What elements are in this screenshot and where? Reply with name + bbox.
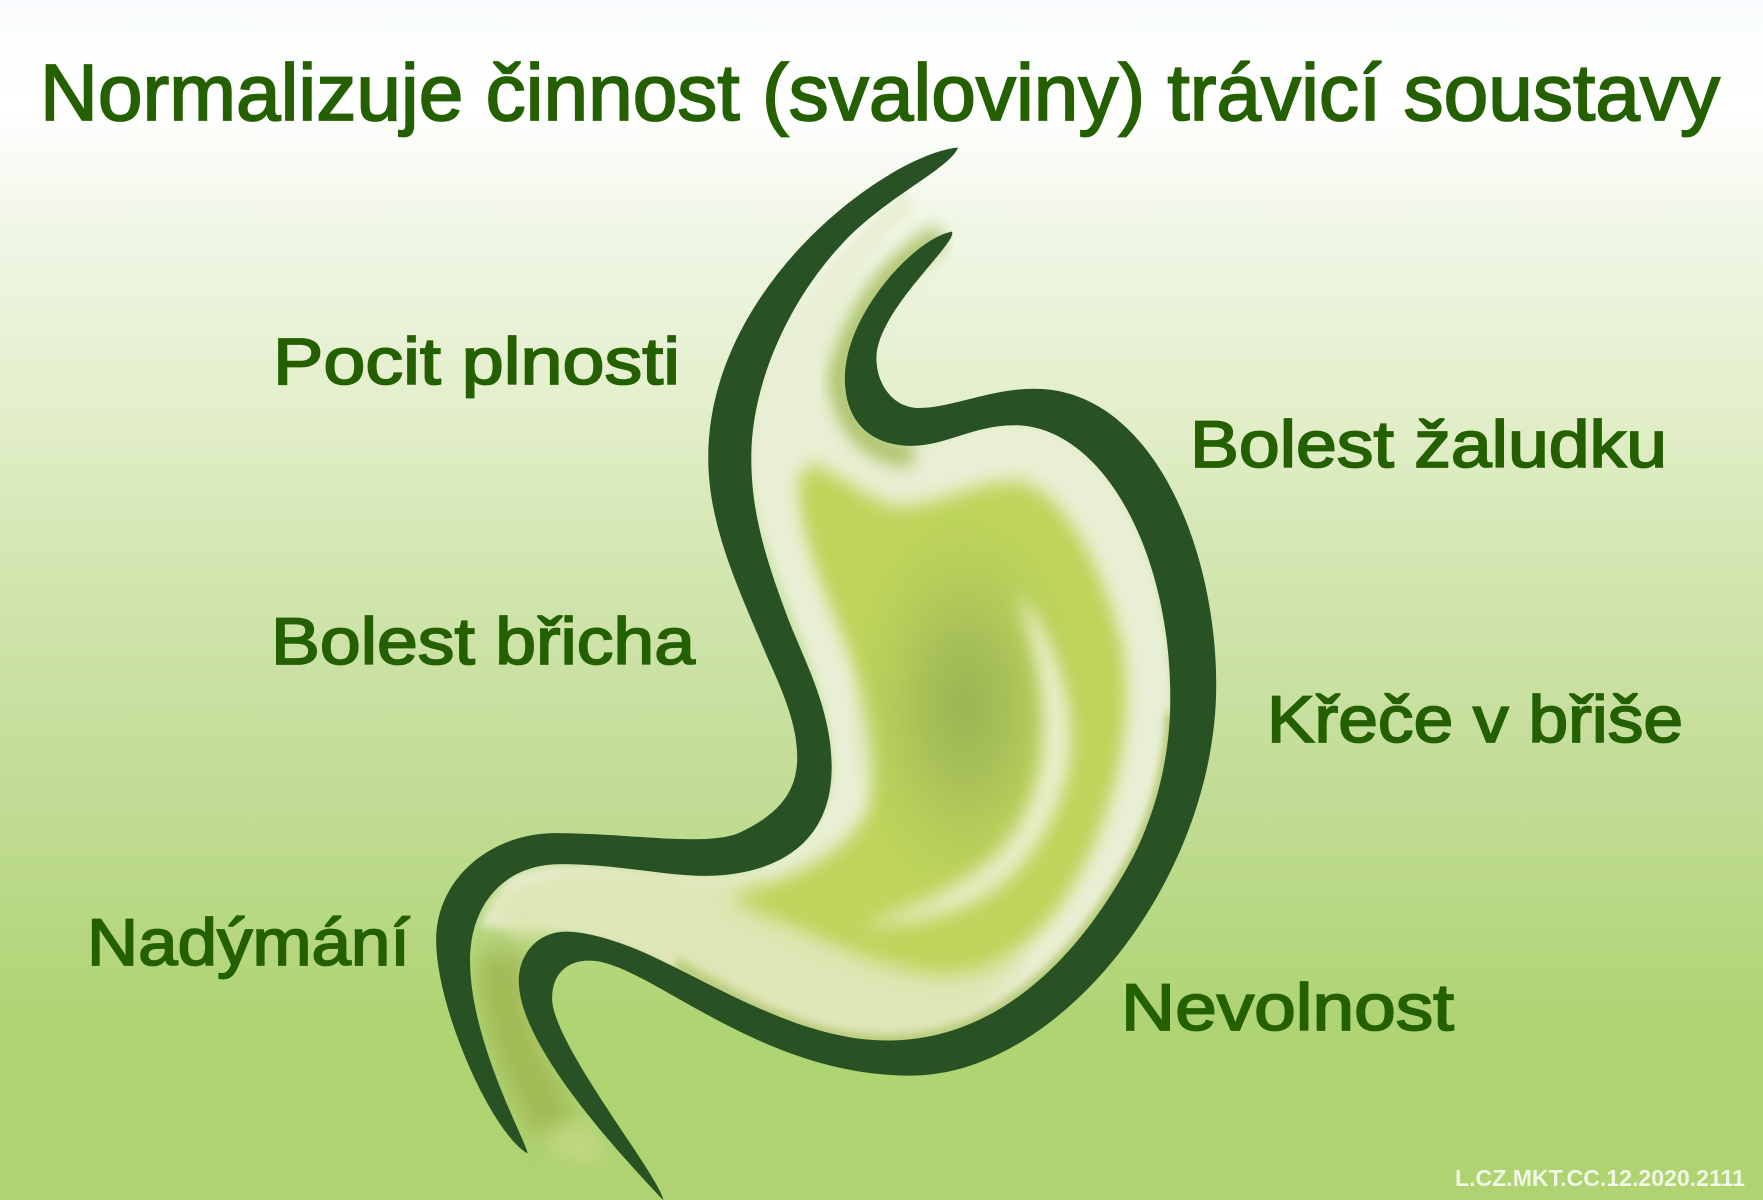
inner edge shadow — [676, 713, 1170, 1041]
lower cream band — [486, 872, 1031, 1036]
gastric light streak — [859, 595, 1072, 925]
gastric contents — [730, 466, 1126, 974]
stomach illustration — [436, 148, 1216, 1200]
stomach cream lining — [480, 189, 1170, 1041]
upper esophagus shading — [839, 241, 934, 454]
stomach outline: greater curvature — [519, 232, 1216, 1200]
label: Bolest břicha: Bolest břicha — [271, 604, 695, 678]
label: Křeče v břiše: Křeče v břiše — [1267, 682, 1683, 756]
duodenum shading — [477, 947, 578, 1140]
label: Pocit plnosti: Pocit plnosti — [273, 324, 680, 398]
label: Bolest žaludku: Bolest žaludku — [1190, 407, 1667, 481]
duodenum fade — [538, 1122, 610, 1160]
stomach outline: lesser curvature — [436, 148, 958, 1154]
label: Nadýmání: Nadýmání — [87, 905, 411, 979]
title: Normalizuje činnost (svaloviny) trávicí soustavy — [40, 48, 1720, 137]
label: Nevolnost: Nevolnost — [1121, 970, 1454, 1044]
document code: L.CZ.MKT.CC.12.2020.2111 — [1455, 1165, 1745, 1191]
gastric dark center — [845, 506, 1086, 905]
